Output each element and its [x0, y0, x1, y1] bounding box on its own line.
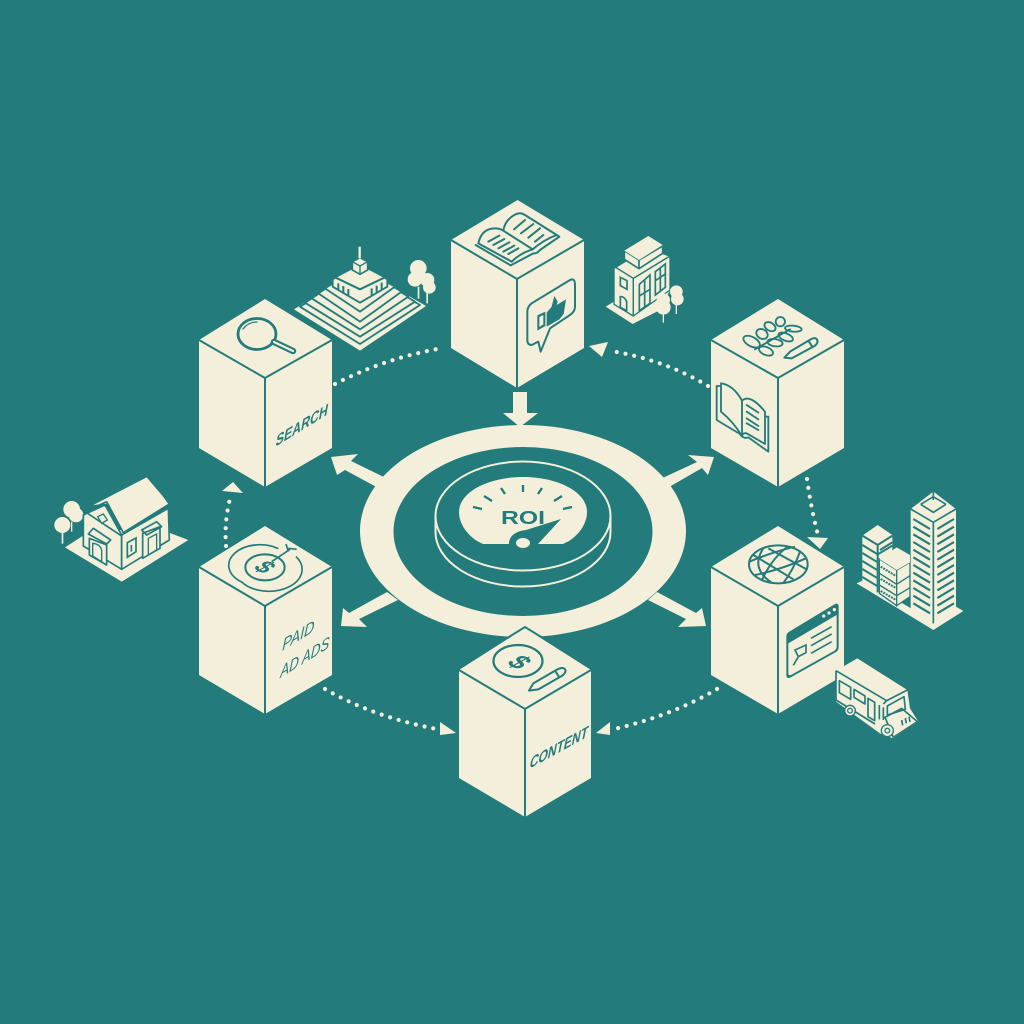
icon: dollar coin: [494, 645, 542, 677]
icon: open book on left face: [717, 383, 768, 452]
arrow: ring to search: [331, 454, 390, 490]
central ROI ring: [360, 425, 686, 637]
gauge dial face: [459, 477, 587, 544]
icon: browser window: [786, 604, 839, 678]
vehicle: bus: [836, 658, 918, 738]
building: city towers: [857, 492, 963, 630]
icon: pencil: [784, 338, 818, 358]
building: office with trees: [606, 236, 684, 324]
label: search: SEARCH: [274, 399, 330, 451]
dollar sign on target: $: [246, 557, 282, 577]
ROI label: ROI: [501, 508, 545, 528]
arrow: ring to paid ads: [341, 592, 398, 627]
arrow: top cube to ring: [503, 392, 538, 427]
building: stepped pyramid with trees: [294, 247, 436, 351]
label: content: CONTENT: [528, 721, 591, 773]
building: house with trees: [54, 477, 188, 582]
icon: target with dollar: [229, 544, 302, 591]
ROI gauge disc: [436, 462, 610, 586]
arrowheads on dotted connectors: [222, 342, 828, 735]
arrow: ring to book cube: [656, 455, 714, 490]
cube: reviews: [451, 200, 584, 388]
cube: plant and book: [711, 299, 844, 487]
cube: paid ads: [199, 526, 332, 714]
dotted flow connectors: [226, 348, 818, 730]
dollar sign on coin: $: [500, 651, 540, 673]
cube: search: [199, 299, 332, 487]
icon: magnifier: [238, 318, 293, 351]
icon: thumbs-up speech bubble: [527, 279, 575, 352]
icon: open book on top: [476, 213, 559, 265]
icon: leafy branch: [742, 317, 802, 357]
arrow: ring to web cube: [648, 592, 706, 627]
icon: globe: [749, 545, 808, 583]
cube: web: [711, 526, 844, 714]
label: paid ad ads: AD ADS: [279, 632, 331, 682]
cube: content: [457, 627, 593, 817]
label: paid ad ads: PAID: [282, 616, 315, 655]
icon: pencil: [529, 668, 566, 691]
trees: [408, 260, 436, 303]
gauge needle: [509, 519, 561, 548]
gauge tick marks: [473, 485, 572, 509]
